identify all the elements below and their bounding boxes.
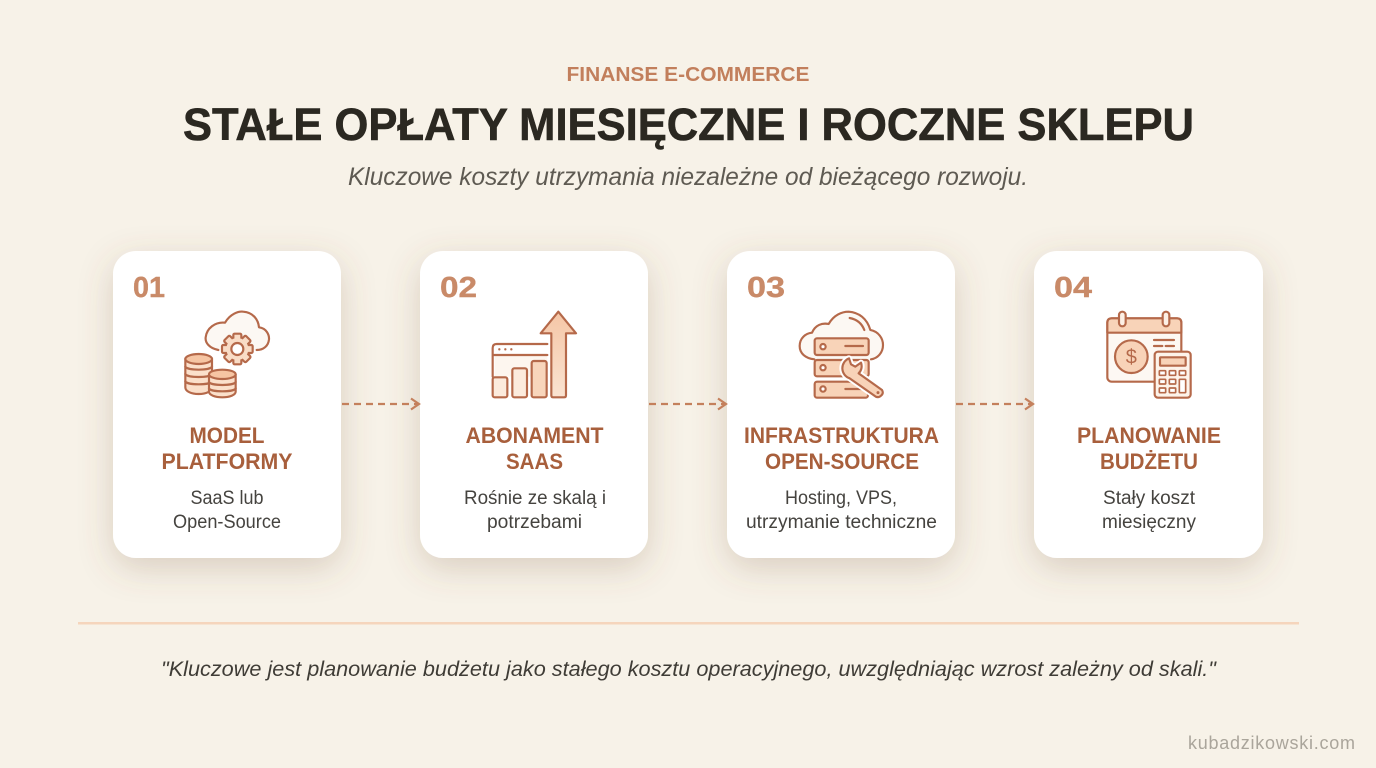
title: STAŁE OPŁATY MIESIĘCZNE I ROCZNE SKLEPU	[183, 99, 1194, 150]
card 2 description: Rośnie ze skalą i	[464, 488, 606, 509]
icon: calendar, coin and calculator: $	[1126, 347, 1137, 369]
panel: card 1	[113, 251, 341, 558]
number 04: 04	[1054, 272, 1092, 304]
card 2 description: potrzebami	[487, 512, 582, 533]
number 01: 01	[133, 272, 165, 304]
card 3 description: utrzymanie techniczne	[746, 512, 937, 533]
card 1 heading: PLATFORMY	[162, 449, 293, 474]
card 4 description: Stały koszt	[1103, 488, 1196, 509]
arrow 3 to 4	[956, 398, 1033, 410]
card 3 heading: OPEN-SOURCE	[765, 449, 919, 474]
card 3 heading: INFRASTRUKTURA	[744, 423, 939, 448]
subtitle: Kluczowe koszty utrzymania niezależne od bieżącego rozwoju.	[348, 163, 1028, 191]
card 4 heading: BUDŻETU	[1100, 449, 1198, 474]
icon: browser window, bars and arrow	[493, 312, 576, 397]
watermark: kubadzikowski.com	[1188, 733, 1355, 753]
card 1 description	[173, 488, 281, 533]
panel: card 2	[420, 251, 648, 558]
card 2 heading: ABONAMENT	[466, 423, 604, 448]
eyebrow: FINANSE E-COMMERCE	[566, 64, 810, 86]
icon: cloud server and wrench	[800, 312, 883, 398]
icon: calendar, coin and calculator	[1107, 312, 1191, 398]
panel: card 3	[727, 251, 955, 558]
card 1 heading	[162, 423, 293, 474]
panel: card 4	[1034, 251, 1263, 558]
card 4 heading	[1077, 423, 1221, 474]
arrow 2 to 3	[649, 398, 726, 410]
card 4 description: miesięczny	[1102, 512, 1196, 533]
card 3 description: Hosting, VPS,	[785, 488, 897, 509]
card 4 heading: PLANOWANIE	[1077, 423, 1221, 448]
card 4 description	[1102, 488, 1196, 533]
card 1 description: SaaS lub	[190, 488, 264, 509]
card 3 description	[746, 488, 937, 533]
card 1 description: Open-Source	[173, 512, 281, 533]
card 1 heading: MODEL	[190, 423, 264, 448]
number 02: 02	[440, 272, 477, 304]
card 3 heading	[744, 423, 939, 474]
card 2 heading: SAAS	[506, 449, 563, 474]
card 2 heading	[466, 423, 604, 474]
number 03: 03	[747, 272, 785, 304]
quote: "Kluczowe jest planowanie budżetu jako stałego kosztu operacyjnego, uwzględniając wzrost zależny od skali."	[161, 658, 1218, 681]
icon: cloud, gear and coins	[185, 312, 269, 397]
card 2 description	[464, 488, 606, 533]
arrow 1 to 2	[342, 398, 419, 410]
